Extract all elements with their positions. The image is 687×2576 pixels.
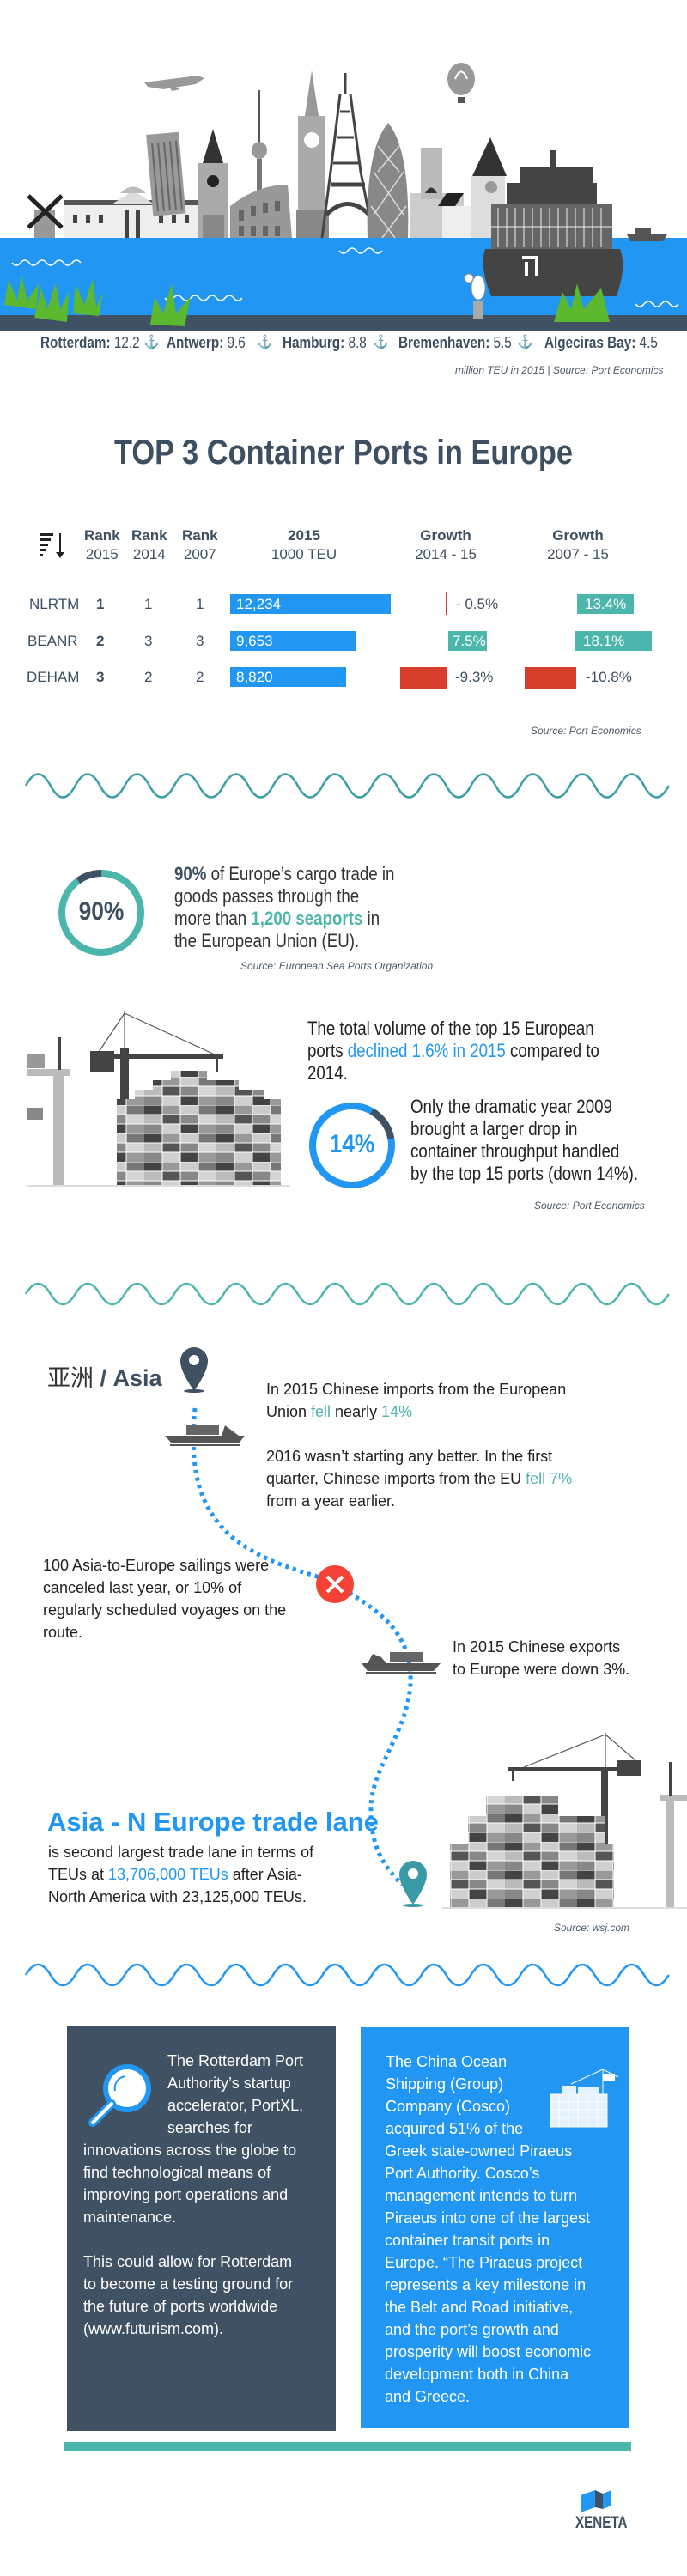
text: 2009 drop <box>410 1096 638 1184</box>
windmill <box>28 196 62 238</box>
palace <box>64 187 202 238</box>
panel: rotterdam: the future of ports worldwide <box>83 2298 277 2315</box>
ring: 14%: 14% <box>330 1130 374 1158</box>
row DEHAM: 8,820 <box>236 669 273 685</box>
port volumes row: Hamburg: 8.8 <box>283 334 367 351</box>
text: canceled sailings: canceled last year, or 10% of <box>43 1579 241 1596</box>
text: total volume <box>307 1018 599 1084</box>
port volumes row <box>40 334 658 351</box>
plane <box>144 76 204 91</box>
port volumes row: Rotterdam: 12.2 <box>40 334 140 351</box>
panel: piraeus: Port Authority. Cosco’s <box>385 2165 539 2182</box>
row NLRTM: - 0.5% <box>456 596 498 612</box>
panel: rotterdam: innovations across the globe to <box>83 2142 296 2159</box>
table: top 3 ports: Growth <box>552 527 604 544</box>
panel: piraeus: Shipping (Group) <box>386 2075 503 2093</box>
ring: 90% <box>58 870 144 956</box>
logo: xeneta <box>575 2490 628 2532</box>
tv tower <box>252 90 267 193</box>
pisa tower <box>146 132 185 216</box>
route map <box>165 1347 687 1909</box>
row NLRTM: 1 <box>144 596 152 612</box>
church <box>410 148 481 238</box>
row BEANR <box>27 631 652 651</box>
panel: piraeus: Company (Cosco) <box>386 2098 510 2115</box>
panel: rotterdam: to become a testing ground for <box>83 2275 293 2293</box>
source: port economics: million TEU in 2015 | Source: Port Economics <box>455 364 664 376</box>
row BEANR: 7.5% <box>453 633 486 649</box>
text: chinese imports: 2016 wasn’t starting any better. In the first <box>266 1448 552 1465</box>
row BEANR: 9,653 <box>236 633 273 649</box>
table: top 3 ports: 2014 <box>133 546 166 562</box>
panel: rotterdam: improving port operations and <box>83 2186 288 2203</box>
table: top 3 ports: 1000 TEU <box>271 546 337 562</box>
wave divider 1 <box>25 773 670 799</box>
icon: cancel <box>316 1565 354 1603</box>
text: chinese exports <box>453 1638 629 1678</box>
icon: sort <box>40 533 64 558</box>
port volumes row: ⚓ <box>257 335 273 349</box>
icon: europe pin <box>399 1861 427 1907</box>
colosseum <box>230 185 292 238</box>
text: chinese imports: from a year earlier. <box>266 1492 395 1510</box>
text: trade lane <box>48 1844 314 1905</box>
panel: piraeus: The China Ocean <box>386 2053 507 2070</box>
text: canceled sailings: regularly scheduled voyages on the <box>43 1601 286 1619</box>
ring: 90%: 90% <box>79 897 124 926</box>
kremlin tower <box>198 129 228 238</box>
icon: magnifier <box>88 2064 151 2127</box>
text: chinese exports: In 2015 Chinese exports <box>453 1638 620 1656</box>
row DEHAM: 3 <box>96 669 104 685</box>
text: trade lane: TEUs at 13,706,000 TEUs after Asia- <box>48 1866 302 1883</box>
text: canceled sailings: 100 Asia-to-Europe sailings were <box>43 1557 269 1574</box>
row DEHAM: 2 <box>144 669 152 685</box>
table: top 3 ports: Growth <box>420 527 471 544</box>
footer bar <box>64 2442 631 2451</box>
logo: xeneta: XENETA <box>575 2514 628 2532</box>
row NLRTM: 1 <box>196 596 204 612</box>
panel: piraeus: the Belt and Road initiative, <box>385 2299 573 2316</box>
table: top 3 ports: 2007 - 15 <box>547 546 609 562</box>
water <box>0 238 687 315</box>
table: top 3 ports: 2015 <box>288 527 320 544</box>
text: canceled sailings <box>43 1557 286 1641</box>
balloon <box>447 63 475 103</box>
source: port economics table: Source: Port Economics <box>531 725 641 737</box>
port volumes row: Bremenhaven: 5.5 <box>398 334 512 351</box>
panel: rotterdam: accelerator, PortXL, <box>167 2097 303 2114</box>
text: 90% of cargo <box>174 863 394 951</box>
panel: piraeus: container transit ports in <box>385 2232 550 2249</box>
text: 90% of cargo: goods passes through the <box>174 885 359 907</box>
row BEANR: BEANR <box>27 633 78 649</box>
table: top 3 ports: 2014 - 15 <box>415 546 477 562</box>
row DEHAM <box>27 667 632 689</box>
table: top 3 ports: 2015 <box>86 546 119 562</box>
panel: piraeus: represents a key milestone in <box>385 2276 586 2293</box>
row DEHAM: -9.3% <box>455 669 493 685</box>
text: 2009 drop: by the top 15 ports (down 14%). <box>410 1163 638 1184</box>
panel: piraeus: Greek state-owned Piraeus <box>385 2142 572 2160</box>
source: wsj: Source: wsj.com <box>554 1922 629 1934</box>
panel: piraeus: development both in China <box>385 2366 568 2383</box>
panel: piraeus: and Greece. <box>385 2388 470 2405</box>
prague tower <box>471 137 507 238</box>
port volumes row: Antwerp: 9.6 <box>167 334 246 351</box>
quay <box>0 315 687 331</box>
gherkin <box>368 123 408 238</box>
row NLRTM: 1 <box>96 596 104 612</box>
small ship <box>627 228 667 241</box>
row BEANR: 3 <box>196 633 204 649</box>
panel: piraeus: acquired 51% of the <box>386 2120 523 2137</box>
row DEHAM: DEHAM <box>27 669 79 685</box>
row NLRTM: NLRTM <box>29 596 79 612</box>
port volumes row: ⚓ <box>517 335 533 349</box>
big ben <box>296 70 329 238</box>
text: 90% of cargo: more than 1,200 seaports in <box>174 908 380 929</box>
panel: piraeus: and the port’s growth and <box>385 2321 559 2338</box>
eiffel tower <box>322 73 374 238</box>
heading: asia: 亚洲 / Asia <box>47 1365 162 1391</box>
dotted route <box>193 1408 410 1885</box>
table: top 3 ports: Rank <box>182 527 218 544</box>
text: total volume: ports declined 1.6% in 2015 compared to <box>307 1040 599 1061</box>
table: top 3 ports: Rank <box>84 527 120 544</box>
panel: piraeus: Piraeus into one of the largest <box>385 2209 590 2227</box>
text: total volume: The total volume of the top 15 European <box>307 1018 594 1039</box>
icon: ship 1 <box>165 1425 245 1446</box>
panel: rotterdam: This could allow for Rotterdam <box>83 2253 292 2270</box>
text: 2009 drop: brought a larger drop in <box>410 1118 577 1139</box>
text: chinese imports: In 2015 Chinese imports from the European <box>266 1381 566 1398</box>
waves <box>12 248 678 307</box>
heading: trade lane: Asia - N Europe trade lane <box>47 1807 379 1837</box>
text: chinese imports: quarter, Chinese imports from the EU fell 7% <box>266 1470 572 1487</box>
icon: ship 2 <box>362 1652 441 1674</box>
wave divider 2 <box>25 1283 670 1305</box>
row BEANR: 2 <box>96 633 104 649</box>
panel: rotterdam: Authority’s startup <box>167 2075 291 2092</box>
text: trade lane: North America with 23,125,000 TEUs. <box>48 1888 307 1905</box>
ring: 14% <box>309 1103 395 1188</box>
row NLRTM: 13.4% <box>585 596 626 612</box>
icon: port crane: ⚓ <box>143 335 160 349</box>
table: top 3 ports <box>27 527 652 689</box>
illustration: containers and crane <box>442 1733 687 1909</box>
panel: piraeus: prosperity will boost economic <box>385 2343 591 2360</box>
panel: rotterdam: maintenance. <box>83 2208 176 2226</box>
text: canceled sailings: route. <box>43 1624 82 1641</box>
table: top 3 ports: Rank <box>131 527 167 544</box>
row BEANR: 3 <box>144 633 152 649</box>
text: total volume: 2014. <box>307 1062 348 1084</box>
text: chinese imports <box>266 1381 572 1510</box>
panel: rotterdam: find technological means of <box>83 2164 271 2181</box>
row BEANR: 18.1% <box>583 633 624 649</box>
grass <box>4 275 610 326</box>
bird on post <box>465 274 485 319</box>
panel: rotterdam: The Rotterdam Port <box>167 2052 303 2069</box>
source: port economics 2: Source: Port Economics <box>534 1200 645 1212</box>
text: chinese imports: Union fell nearly 14% <box>266 1403 412 1420</box>
row DEHAM: -10.8% <box>586 669 632 685</box>
table: top 3 ports: 2007 <box>184 546 216 562</box>
row NLRTM <box>29 592 634 615</box>
source: espo: Source: European Sea Ports Organization <box>240 960 433 972</box>
panel: piraeus <box>361 2027 629 2428</box>
panel: rotterdam <box>67 2026 336 2431</box>
text: trade lane: is second largest trade lane in terms of <box>48 1844 313 1861</box>
panel: rotterdam: (www.futurism.com). <box>83 2320 223 2337</box>
illustration: cranes and containers <box>27 1011 290 1187</box>
panel: rotterdam: searches for <box>167 2119 252 2136</box>
port volumes row: ⚓ <box>373 335 389 349</box>
text: 2009 drop: Only the dramatic year 2009 <box>410 1096 612 1117</box>
row NLRTM: 12,234 <box>236 596 281 612</box>
icon: asia pin <box>180 1347 208 1393</box>
row DEHAM: 2 <box>196 669 204 685</box>
text: 90% of cargo: 90% of Europe’s cargo trade in <box>174 863 394 884</box>
text: chinese exports: to Europe were down 3%. <box>453 1661 629 1678</box>
title: TOP 3 Container Ports in Europe <box>114 434 573 471</box>
port volumes row: Algeciras Bay: 4.5 <box>544 334 658 351</box>
text: 2009 drop: container throughput handled <box>410 1140 619 1162</box>
panel: piraeus: management intends to turn <box>385 2187 577 2204</box>
container ship <box>483 150 623 296</box>
skyline illustration <box>0 63 687 331</box>
text: 90% of cargo: the European Union (EU). <box>174 930 359 951</box>
panel: piraeus: Europe. “The Piraeus project <box>385 2254 582 2271</box>
wave divider 3 <box>25 1963 670 1987</box>
icon: port crane <box>550 2069 618 2128</box>
